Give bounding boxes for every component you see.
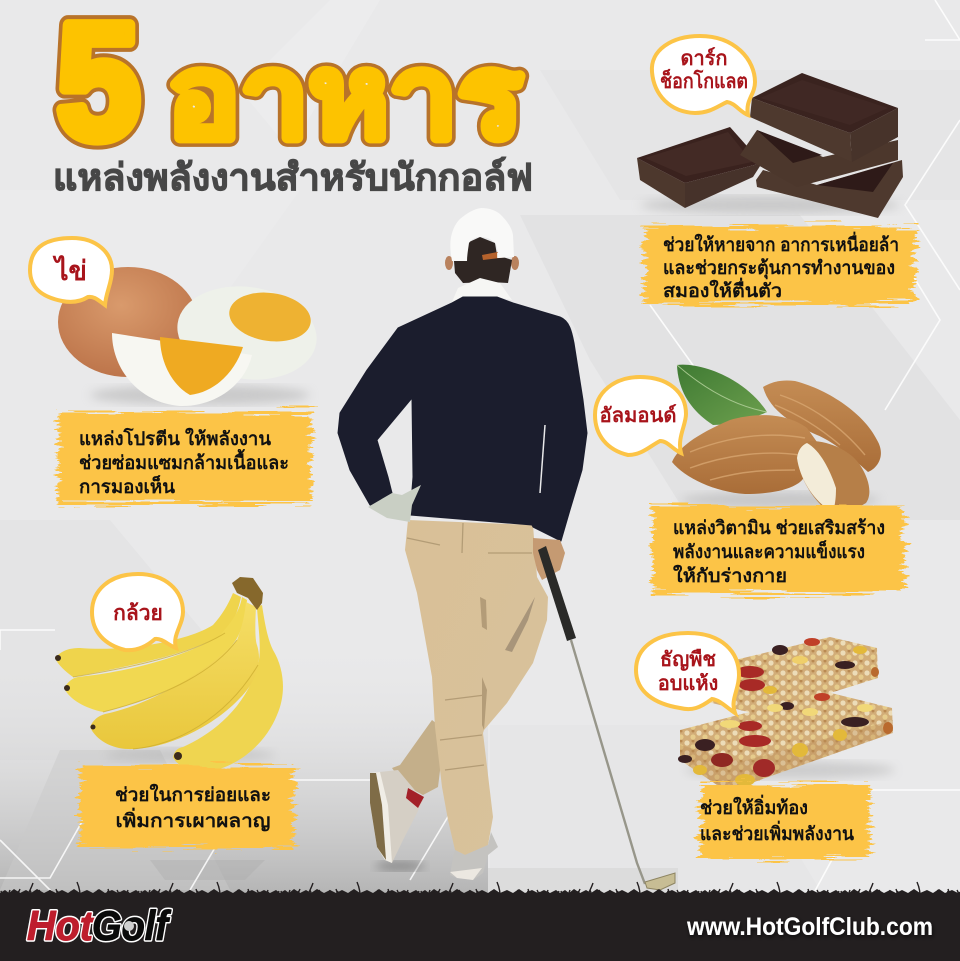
- food: egg: [58, 267, 323, 406]
- leaf: [677, 365, 767, 425]
- bubble: chocolate: ดาร์ก: [680, 47, 728, 70]
- bubble: chocolate: [652, 36, 755, 115]
- top piece: [750, 98, 852, 162]
- front shoe: [450, 832, 498, 880]
- bubble: almond: [595, 377, 686, 455]
- almond front: [672, 415, 817, 494]
- bubble: banana: กล้วย: [113, 601, 163, 625]
- banana 2: [64, 597, 247, 712]
- fruit pieces: [678, 638, 893, 786]
- banana ridges: [73, 633, 258, 749]
- logo: HotGolf: Hot: [27, 902, 95, 949]
- logo: HotGolf: Hot: [27, 902, 95, 949]
- banana 4: [173, 605, 283, 772]
- back leg: [392, 720, 445, 795]
- food: banana: [55, 577, 283, 772]
- panel: cereal bars text: ช่วยให้อิ่มท้อง: [700, 794, 808, 818]
- logo: HotGolf: [27, 902, 172, 949]
- panel: banana text: ช่วยในการย่อยและ: [115, 783, 271, 805]
- panel: banana text: เพิ่มการเผาผลาญ: [116, 807, 271, 832]
- hat: [450, 208, 514, 261]
- title: [57, 0, 523, 173]
- back shoe: [370, 770, 423, 863]
- back bar: [700, 637, 878, 715]
- banana 1: [55, 593, 241, 677]
- bubble: cereal bars: อบแห้ง: [658, 672, 718, 695]
- title: อาหาร: [167, 32, 523, 162]
- almond half: [797, 441, 869, 512]
- collar: [452, 278, 512, 302]
- shadow: [375, 861, 425, 871]
- panel: chocolate text: และช่วยกระตุ้นการทำงานของ: [663, 257, 895, 280]
- egg wedge: [112, 333, 252, 406]
- panel: almond text: แหล่งวิตามิน ช่วยเสริมสร้าง: [673, 517, 885, 538]
- panel: egg text: [58, 412, 312, 504]
- golf club: [538, 546, 675, 890]
- bottom piece: [756, 160, 903, 218]
- golfer: [338, 208, 675, 890]
- banana tips: [55, 655, 61, 661]
- website url: www.HotGolfClub.com: [686, 913, 933, 941]
- panel: cereal bars text: [700, 784, 870, 858]
- title: อาหาร: [167, 32, 523, 162]
- front bar: [680, 692, 893, 788]
- logo: HotGolf: Golf: [92, 902, 172, 949]
- panel: egg text: ช่วยซ่อมแซมกล้ามเนื้อและ: [79, 449, 289, 473]
- panel: cereal bars text: และช่วยเพิ่มพลังงาน: [700, 820, 854, 844]
- almond back: [763, 381, 881, 472]
- head: [445, 237, 519, 283]
- bubble: cereal bars: ธัญพืช: [660, 648, 716, 671]
- middle piece: [740, 130, 898, 187]
- banana 3: [90, 602, 259, 749]
- food: almonds: [672, 365, 881, 512]
- subtitle: แหล่งพลังงานสำหรับนักกอล์ฟ: [53, 157, 533, 198]
- halved egg: [171, 278, 323, 388]
- panel: banana text: [80, 766, 294, 848]
- bubble: chocolate: ช็อกโกแลต: [660, 68, 748, 93]
- food: chocolate: [637, 73, 903, 218]
- bubble: egg: [30, 238, 112, 305]
- food: cereal bars: [678, 637, 895, 788]
- bubble: almond: อัลมอนด์: [600, 404, 676, 427]
- bubble: cereal bars: [636, 633, 739, 713]
- hand: [533, 538, 565, 580]
- bubble: banana: [92, 574, 183, 650]
- panel: egg text: การมองเห็น: [79, 474, 175, 497]
- panel: chocolate text: [645, 226, 915, 304]
- panel: chocolate text: ช่วยให้หายจาก อาการเหนื่อยล้า: [663, 231, 899, 255]
- left piece: [637, 158, 685, 208]
- panel: almond text: พลังงานและความแข็งแรง: [673, 539, 865, 562]
- bubble: egg: ไข่: [52, 255, 87, 286]
- grass footer: [0, 878, 960, 961]
- glove: [368, 485, 421, 522]
- logo: HotGolf: Golf: [92, 902, 172, 949]
- panel: almond text: ให้กับร่างกาย: [673, 564, 787, 586]
- whole egg: [58, 267, 198, 377]
- panel: almond text: [652, 506, 904, 594]
- panel: chocolate text: สมองให้ตื่นตัว: [663, 277, 782, 301]
- sweater: [338, 297, 587, 541]
- trousers: [405, 520, 548, 855]
- stem: [232, 577, 263, 610]
- panel: egg text: แหล่งโปรตีน ให้พลังงาน: [79, 427, 271, 449]
